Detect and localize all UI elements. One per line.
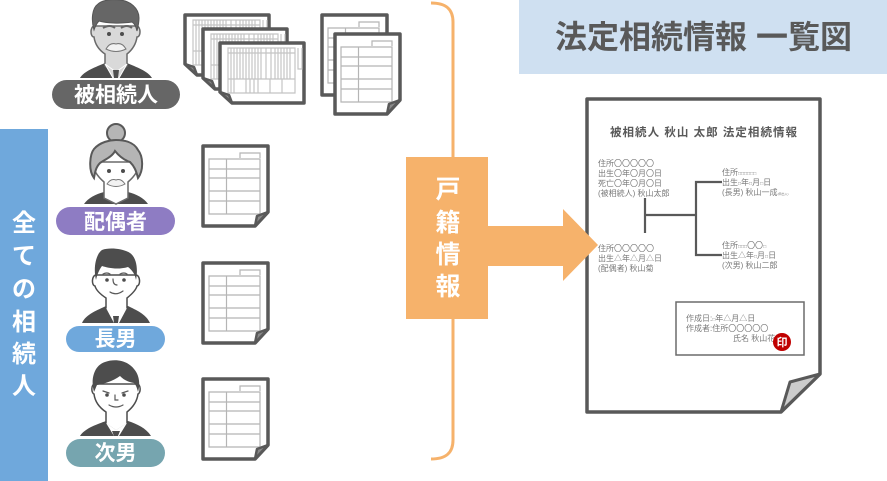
preparer box — [676, 302, 804, 355]
icon: deceased person — [80, 0, 152, 78]
icon: eldest son document — [203, 263, 268, 343]
preparer box: 作成日:□年△月△日 — [686, 313, 755, 323]
icon: family register documents — [185, 15, 304, 103]
box: family register information: 戸 — [435, 176, 461, 204]
side label: all heirs: て — [12, 243, 36, 270]
spouse details — [598, 243, 662, 273]
side label: all heirs: 全 — [12, 210, 36, 237]
spouse details: 出生△年△月△日 — [598, 253, 662, 263]
spouse details: 住所〇〇〇〇〇 — [598, 243, 654, 253]
eldest son details: (長男) 秋山一成(申出人) — [722, 187, 789, 197]
title banner: 法定相続情報 一覧図 — [555, 19, 852, 55]
label: 被相続人: 被相続人 — [74, 84, 158, 107]
icon: second son document — [203, 379, 268, 459]
seal — [773, 333, 791, 351]
side label: all heirs: 相 — [12, 309, 36, 336]
preparer box: 氏名 秋山花子 — [733, 333, 783, 343]
icon: resident record documents — [322, 15, 400, 114]
label: 長男: 長男 — [94, 328, 136, 351]
side label: all heirs: 続 — [12, 341, 36, 368]
icon: spouse document — [203, 146, 268, 226]
bracket — [431, 3, 453, 459]
side label: all heirs: の — [12, 276, 36, 303]
label: 被相続人 — [52, 80, 180, 109]
spouse details: (配偶者) 秋山菊 — [598, 263, 654, 273]
second son details — [722, 240, 778, 270]
icon: spouse — [84, 124, 148, 204]
certificate document — [587, 99, 820, 412]
label: 長男 — [66, 326, 165, 352]
box: family register information: 報 — [435, 273, 461, 301]
box: family register information: 籍 — [435, 209, 461, 237]
deceased details — [598, 158, 670, 198]
label: 配偶者: 配偶者 — [84, 211, 147, 234]
side label: all heirs: 人 — [12, 373, 36, 400]
label: 配偶者 — [56, 207, 175, 235]
title banner — [519, 0, 887, 74]
eldest son details: 住所□□□□□□ — [722, 167, 756, 177]
second son details: (次男) 秋山二郎 — [722, 260, 778, 270]
icon: eldest son — [82, 249, 150, 323]
icon: second son — [80, 360, 151, 436]
label: 次男 — [66, 439, 165, 467]
deceased details: 住所〇〇〇〇〇 — [598, 158, 654, 168]
side label: all heirs — [0, 129, 48, 481]
preparer box: 作成者:住所〇〇〇〇〇 — [686, 323, 768, 333]
box: family register information: 情 — [435, 241, 461, 269]
eldest son details: 出生□年□月□日 — [722, 177, 771, 187]
deceased details: 死亡〇年〇月〇日 — [598, 178, 662, 188]
eldest son details — [722, 167, 789, 197]
deceased details: 出生〇年〇月〇日 — [598, 168, 662, 178]
deceased details: (被相続人) 秋山太郎 — [598, 188, 670, 198]
family tree lines — [645, 182, 722, 255]
label: 次男: 次男 — [94, 442, 136, 465]
certificate heading: 被相続人 秋山 太郎 法定相続情報 — [610, 125, 798, 139]
second son details: 出生△年□月□日 — [722, 250, 776, 260]
seal: 印 — [776, 335, 788, 349]
arrow — [488, 209, 598, 281]
box: family register information — [406, 157, 488, 319]
second son details: 住所□□□〇〇□ — [722, 240, 766, 250]
